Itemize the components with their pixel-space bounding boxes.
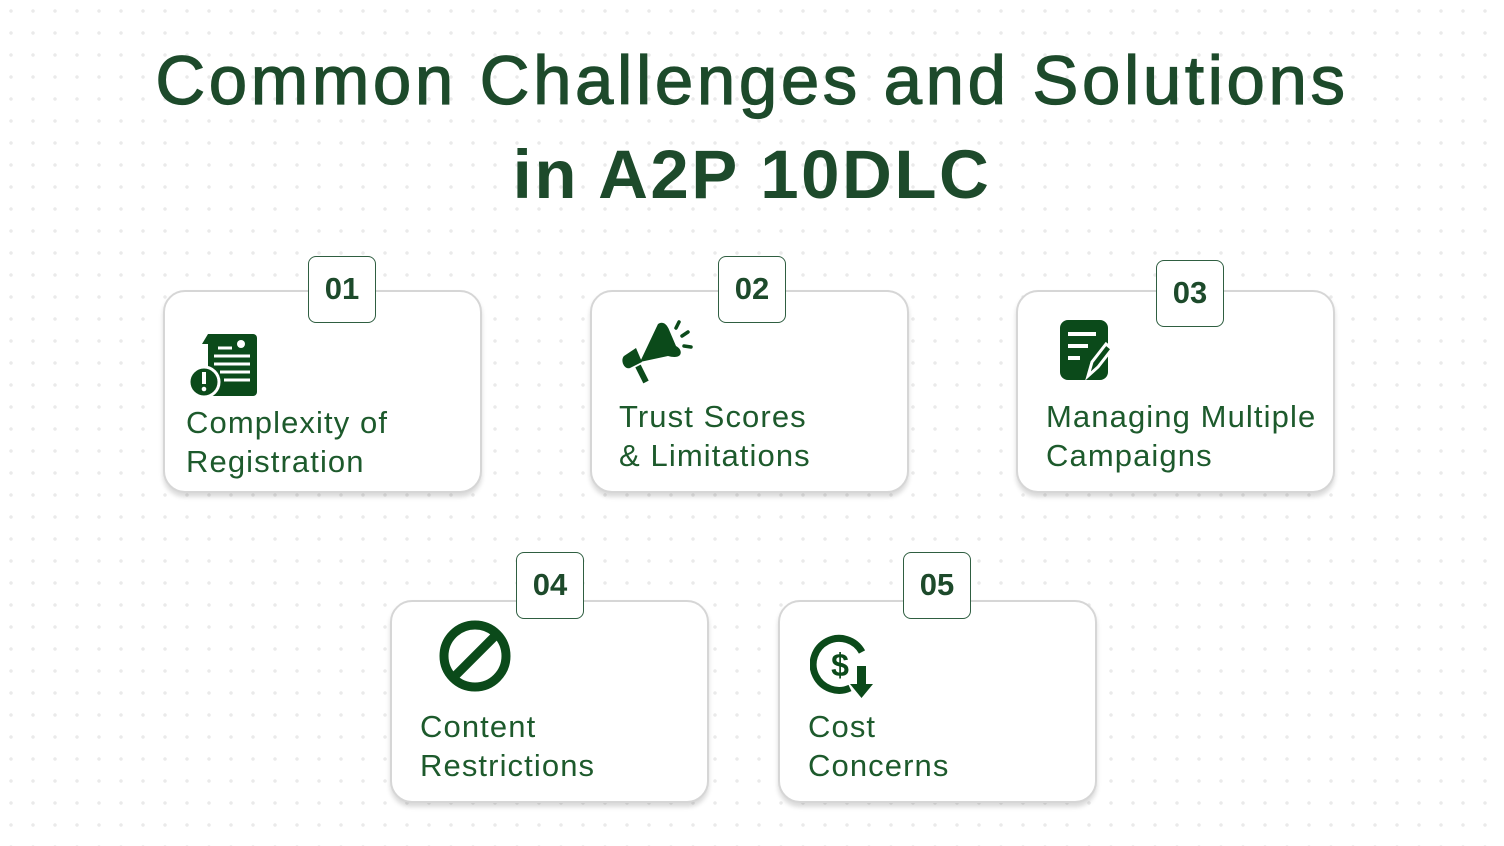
label [619,399,811,473]
panel: cost concerns [778,600,1097,803]
icon: document with alert [190,334,257,396]
label [1046,399,1316,473]
label: & Limitations [619,438,811,473]
icon: prohibited [440,620,510,692]
badge 05 [903,552,971,619]
icon: megaphone [622,320,693,384]
badge 01 [308,256,376,323]
title: Common Challenges and Solutions [155,42,1349,119]
badge 03: 03 [1173,275,1207,310]
title [155,42,1349,213]
title: in A2P 10DLC [513,136,991,213]
label: Trust Scores [619,399,807,434]
icon: form with pen [1060,320,1110,380]
badge 04: 04 [533,567,567,602]
badge 03 [1156,260,1224,327]
panel: trust scores [590,290,909,493]
label: Cost [808,709,876,744]
label: Registration [186,444,365,479]
label [808,709,949,783]
label [420,709,595,783]
panel: managing multiple campaigns [1016,290,1335,493]
label: Campaigns [1046,438,1213,473]
badge 02: 02 [735,271,769,306]
badge 01: 01 [325,271,359,306]
panel: complexity of registration [163,290,482,493]
badge 02 [718,256,786,323]
icon: dollar with down arrow: $ [831,647,849,683]
label: Content [420,709,536,744]
label: Restrictions [420,748,595,783]
label: Concerns [808,748,949,783]
label: Complexity of [186,405,388,440]
icon: dollar with down arrow [810,634,873,698]
label [186,405,388,479]
panel: content restrictions [390,600,709,803]
badge 05: 05 [920,567,954,602]
badge 04 [516,552,584,619]
label: Managing Multiple [1046,399,1316,434]
